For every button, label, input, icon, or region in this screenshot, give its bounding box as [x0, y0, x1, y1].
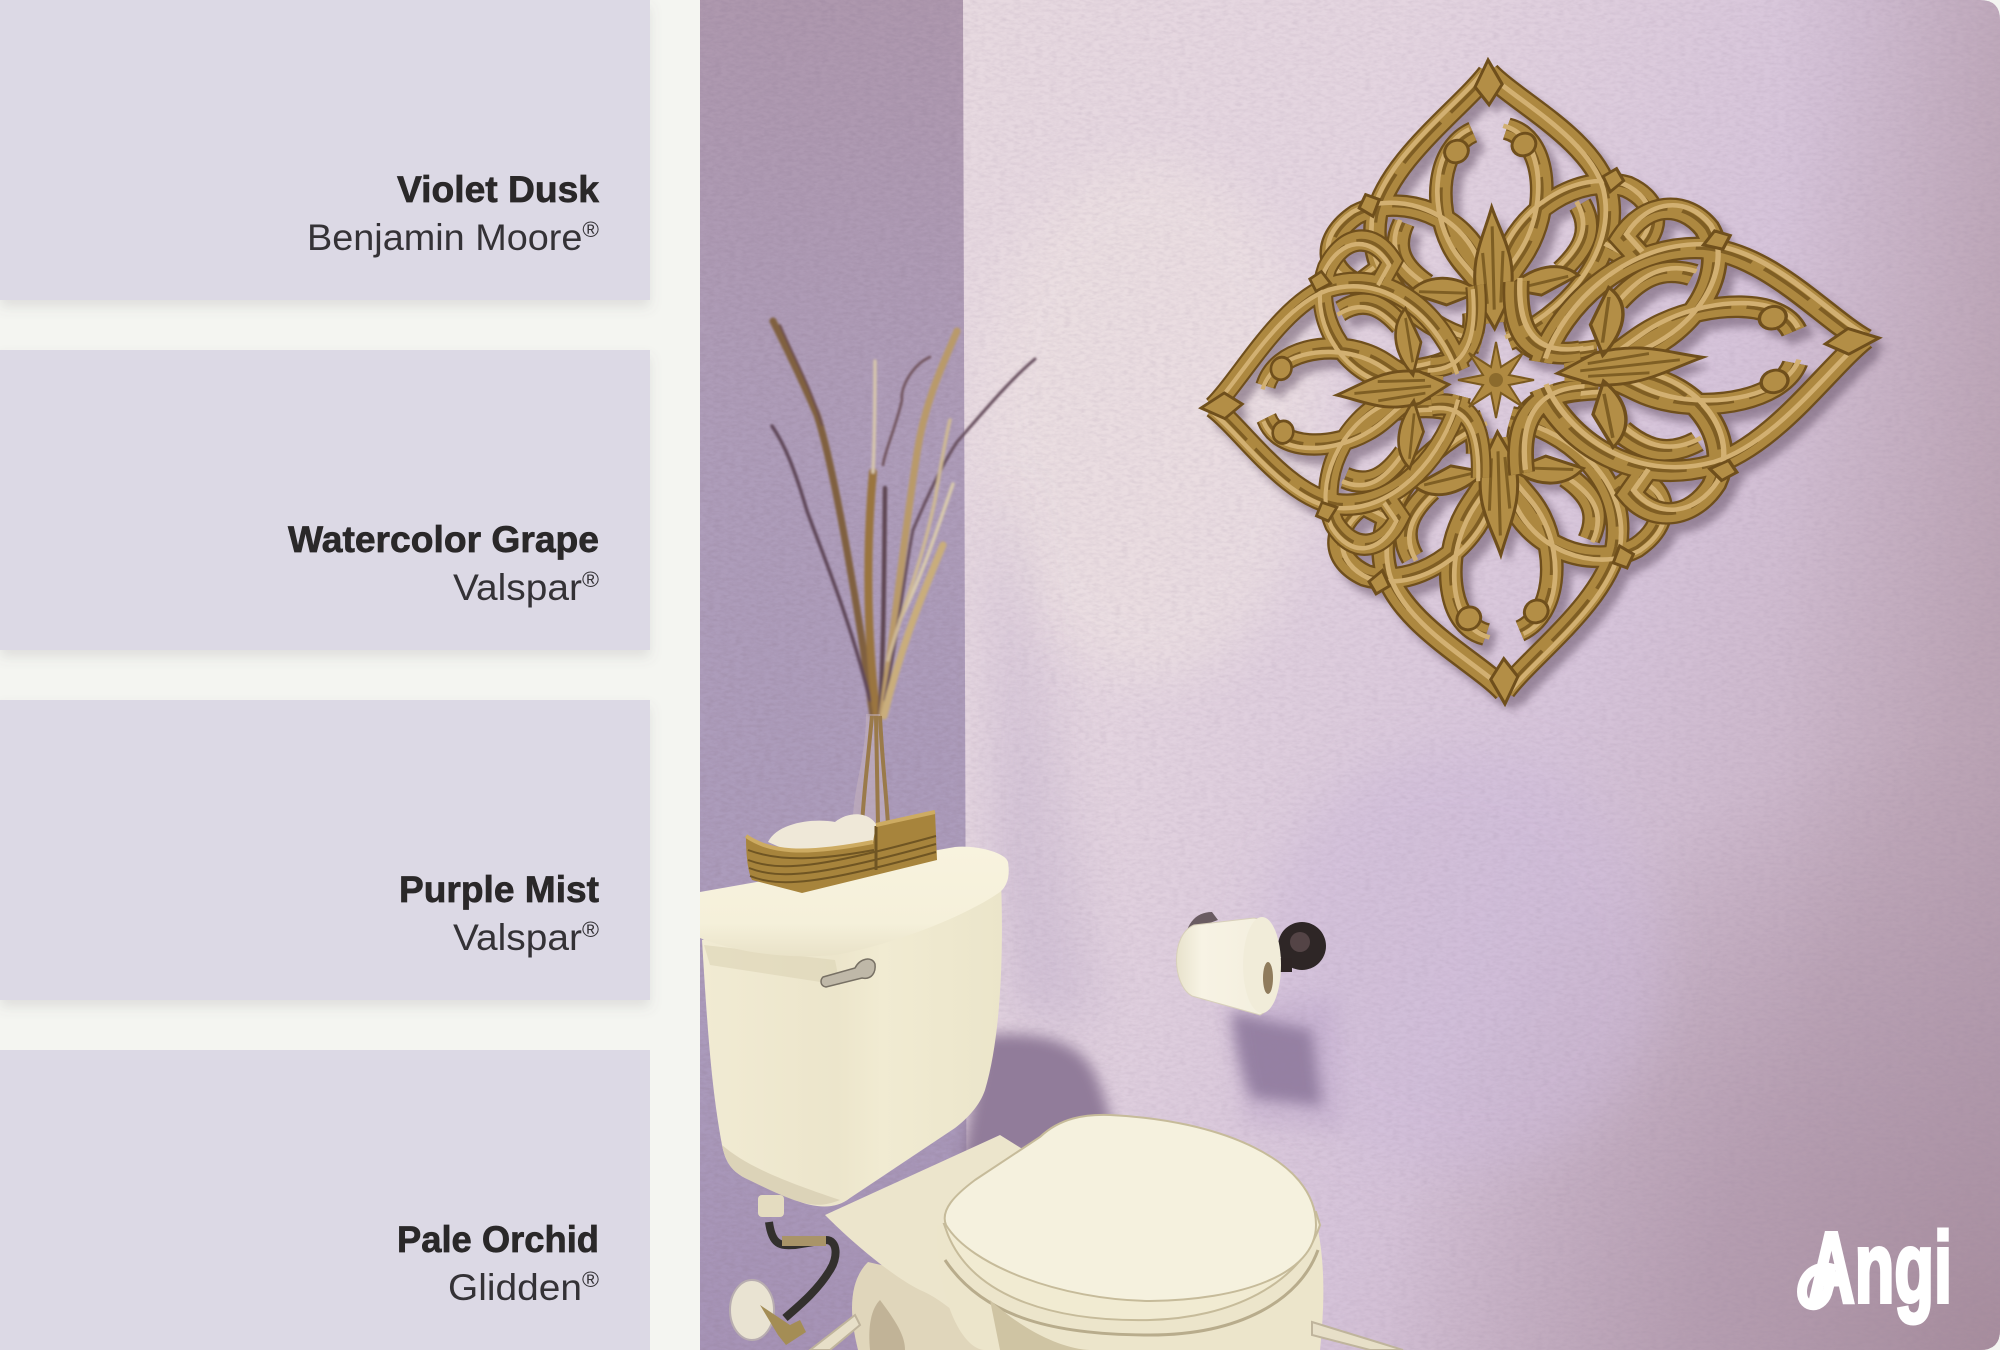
wall shadows — [960, 470, 1340, 1165]
lower rim — [990, 1300, 1090, 1350]
ornament quadrants — [1197, 43, 1883, 721]
paper roll end — [1243, 917, 1281, 1013]
holder right mount — [1278, 922, 1326, 970]
tank lid — [700, 847, 1009, 956]
toilet neck — [825, 1135, 1022, 1308]
swatch: Violet Dusk: Violet Dusk — [397, 169, 599, 210]
swatch: Pale Orchid: Glidden — [448, 1267, 576, 1308]
water pipe and valve — [730, 1195, 836, 1345]
swatch: Violet Dusk — [0, 0, 650, 300]
panel: colour swatch list — [0, 0, 650, 1350]
wicker basket — [746, 812, 937, 893]
swatch: Watercolor Grape — [0, 350, 650, 650]
swatch: Purple Mist — [0, 700, 650, 1000]
panel: bathroom photo illustration — [700, 0, 2000, 1350]
toilet lid — [945, 1115, 1316, 1301]
toilet bowl — [937, 1220, 1323, 1350]
swatch: Violet Dusk: ® — [582, 217, 599, 242]
toilet base pedestal — [852, 1262, 983, 1350]
left wall — [700, 0, 967, 1350]
swatch: Purple Mist: ® — [582, 917, 599, 942]
toilet seat — [944, 1212, 1320, 1320]
swatch: Pale Orchid — [0, 1050, 650, 1350]
towels — [768, 814, 878, 856]
ornament shadow — [1205, 52, 1891, 730]
right wall — [963, 0, 2000, 1350]
swatch: Watercolor Grape: Valspar — [453, 567, 576, 608]
swatch: Watercolor Grape: ® — [582, 567, 599, 592]
wall ornament: carved wooden medallion — [1197, 43, 1891, 730]
wall texture — [963, 0, 1916, 1348]
paper roll — [1176, 918, 1277, 1015]
baseboards — [810, 1315, 1403, 1350]
swatch: Purple Mist: Valspar — [453, 917, 576, 958]
toilet tank — [702, 880, 1002, 1206]
flush handle — [821, 959, 875, 987]
swatch: Watercolor Grape: Watercolor Grape — [288, 519, 599, 560]
swatch: Violet Dusk: Benjamin Moore — [307, 217, 576, 258]
left wall texture — [700, 0, 970, 1350]
holder left post — [1184, 912, 1218, 950]
swatch: Pale Orchid: ® — [582, 1267, 599, 1292]
swatch: Purple Mist: Purple Mist — [399, 869, 599, 910]
toilet paper holder — [1176, 912, 1326, 1015]
glass vase — [853, 714, 890, 825]
toilet — [700, 847, 1323, 1350]
ornament centre flower — [1458, 342, 1534, 418]
dried grass in vase — [772, 321, 1035, 716]
swatch: Pale Orchid: Pale Orchid — [397, 1219, 599, 1260]
